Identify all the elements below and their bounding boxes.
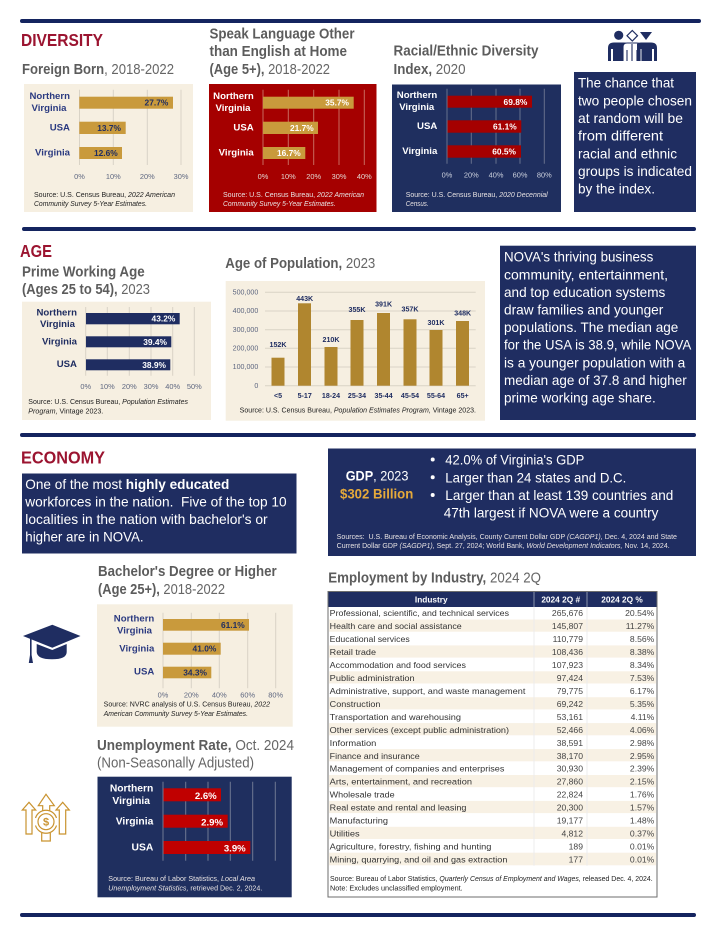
callout: highly educated workforce [22,474,296,554]
table: employment by industry: 4.06% [630,725,655,735]
panel: age of population chart: 0 [254,382,258,390]
callout: NOVA age explanation: NOVA's thriving business [504,250,653,265]
panel: age of population chart: 210K [323,336,340,344]
panel: age of population chart: 355K [349,306,366,314]
panel: prime working age chart: 0% [80,382,91,391]
panel: diversity index chart: Northern [397,90,437,101]
table: employment by industry: 145,807 [552,621,583,631]
panel: unemployment rate chart: 3.9% [224,844,246,855]
table: employment by industry: Professional, scientific, and technical services [330,608,509,618]
callout: highly educated workforce: One of the most highly educated [25,477,229,492]
title: unemployment rate [97,738,294,771]
panel: unemployment rate chart: Northern [110,783,153,794]
panel: foreign born chart: USA [50,122,70,133]
callout: highly educated workforce: higher are in NOVA. [25,530,144,545]
panel: age of population chart: 45-54 [401,392,419,400]
panel: diversity index chart: Virginia [399,102,435,113]
table: employment by industry: Industry [415,594,448,604]
panel: bachelor's degree chart: 40% [212,690,227,699]
panel: unemployment rate chart: Virginia [112,796,150,807]
panel: diversity index chart: 60% [513,170,528,180]
panel: language chart: Northern [213,91,254,102]
panel: language chart: 16.7% [277,148,301,158]
panel: foreign born chart: 27.7% [145,98,169,108]
callout: diversity index explanation: from different [578,129,663,144]
panel: prime working age chart: 50% [187,382,202,391]
panel: GDP: Sources: U.S. Bureau of Economic Analysis, County Current Dollar GDP (CAGDP1), Dec. 4, 2024 and State [337,534,677,541]
panel: diversity index chart: 80% [537,170,552,180]
table: employment by industry: 69,242 [557,699,583,709]
panel: language chart: Community Survey 5-Year Estimates. [223,201,336,208]
table: employment by industry: 19,177 [557,816,583,826]
table: employment by industry: Health care and social assistance [330,621,462,631]
panel: age of population chart: 65+ [457,392,469,400]
panel: prime working age chart: USA [57,359,77,370]
panel: foreign born chart: Virginia [31,103,67,114]
table: employment by industry: Educational services [330,634,410,644]
panel: prime working age chart [22,302,211,420]
callout: diversity index explanation: by the index. [578,182,655,197]
title: speak language other than english [210,27,355,78]
table: employment by industry: Note: Excludes unclassified employment. [330,885,463,892]
callout: diversity index explanation: The chance that [578,76,674,91]
panel: GDP: Larger than 24 states and D.C. [445,470,626,485]
panel: foreign born chart: 12.6% [94,148,118,158]
panel: diversity index chart: 0% [442,170,453,180]
panel: bachelor's degree chart: 80% [268,690,284,699]
panel: age of population chart: 400,000 [233,307,258,315]
table: employment by industry: 0.37% [630,828,655,838]
panel: GDP: $302 Billion [340,486,413,501]
table: employment by industry: 177 [569,854,583,864]
table: employment by industry: 53,161 [557,712,583,722]
panel: age of population chart: <5 [274,392,282,400]
table: employment by industry: 8.34% [630,660,655,670]
callout: NOVA age explanation: prime working age share. [504,391,656,406]
callout: NOVA age explanation: for the USA is 38.9, while NOVA [504,338,692,353]
callout: diversity index explanation: at random will be [578,111,683,126]
table: employment by industry: 107,923 [552,660,583,670]
table: employment by industry: 1.76% [630,790,655,800]
table: employment by industry: 2024 2Q # [541,594,580,604]
panel: unemployment rate chart [98,777,292,897]
icon: graduation cap [23,625,80,663]
panel: foreign born chart: 20% [140,172,155,181]
panel: age of population chart: 357K [402,306,419,314]
panel: language chart: 10% [281,172,296,181]
panel: diversity index chart [392,84,561,212]
panel: language chart: 35.7% [325,98,350,108]
table: employment by industry: 2024 2Q % [601,594,643,604]
table: employment by industry: Agriculture, forestry, fishing and hunting [330,842,492,852]
panel: age of population chart [226,281,485,421]
title: age of population: Age of Population, 2023 [225,256,375,272]
panel: prime working age chart: 40% [165,382,181,391]
panel: age of population chart: 200,000 [233,344,258,352]
panel: unemployment rate chart: 2.9% [201,817,223,828]
panel: language chart: 30% [332,172,347,181]
table: employment by industry: Source: Bureau of Labor Statistics, Quarterly Census of Employment and Wages, released Dec. 4, 2024. [330,876,653,883]
table: employment by industry: 97,424 [557,673,583,683]
panel: age of population chart: Source: U.S. Census Bureau, Population Estimates Program, Vintage 2023. [240,408,476,415]
panel: age of population chart: 301K [428,319,445,327]
title: racial ethnic diversity index [394,44,539,78]
title: unemployment rate: Unemployment Rate, Oct. 2024 [97,738,294,754]
title: racial ethnic diversity index: Index, 2020 [394,62,466,78]
panel: prime working age chart: 20% [122,382,137,391]
table: employment by industry: 1.48% [630,816,655,826]
panel: bachelor's degree chart: 41.0% [193,644,217,654]
panel: bachelor's degree chart: USA [134,667,154,678]
icon: diverse people [608,30,657,61]
panel: prime working age chart: 43.2% [152,314,176,324]
title: racial ethnic diversity index: Racial/Ethnic Diversity [394,44,539,60]
table: employment by industry: 2.39% [630,764,655,774]
table: employment by industry: Utilities [330,828,360,838]
callout: NOVA age explanation: median age of 37.8 and higher [504,373,687,388]
panel: GDP: 42.0% of Virginia's GDP [445,453,584,468]
panel: age of population chart: 5-17 [298,392,312,400]
table: employment by industry: 2.15% [630,777,655,787]
table: employment by industry: 20.54% [625,608,655,618]
table: employment by industry: 7.53% [630,673,655,683]
panel: language chart: Source: U.S. Census Bureau, 2022 American [223,192,364,199]
table: employment by industry: Administrative, support, and waste management [330,686,526,696]
panel: language chart: 20% [306,172,322,181]
title: speak language other than english: Speak Language Other [210,27,355,43]
panel: age of population chart: 35-44 [375,392,393,400]
panel: diversity index chart: 40% [489,170,504,180]
callout: NOVA age explanation [500,246,696,420]
callout: diversity index explanation: groups is indicated [578,164,692,179]
panel: bachelor's degree chart: 60% [240,690,256,699]
panel: GDP: Larger than at least 139 countries and [445,488,673,503]
panel: language chart: 40% [357,172,372,181]
table: employment by industry: 38,591 [557,738,583,748]
table: employment by industry: Finance and insurance [330,751,420,761]
table: employment by industry: Transportation and warehousing [330,712,461,722]
title: bachelor's degree [98,564,277,598]
table: employment by industry: Arts, entertainment, and recreation [330,777,472,787]
table: employment by industry: 8.38% [630,647,655,657]
table: employment by industry: 110,779 [553,634,583,644]
table: employment by industry: Manufacturing [330,816,388,826]
heading: economy: ECONOMY [21,447,105,467]
table: employment by industry: Public administration [330,673,415,683]
panel: bachelor's degree chart: Northern [114,614,154,625]
panel: bachelor's degree chart: 34.3% [183,668,208,678]
table: employment by industry: 265,676 [552,608,583,618]
table: employment by industry: 2.98% [630,738,655,748]
table: employment by industry: 0.01% [630,842,655,852]
panel: prime working age chart: Program, Vintage 2023. [28,408,103,415]
callout: highly educated workforce: workforces in the nation. Five of the top 10 [24,495,287,510]
panel: bachelor's degree chart: 0% [158,690,169,699]
panel: age of population chart: 300,000 [233,326,258,334]
table: employment by industry: Accommodation and food services [330,660,466,670]
title: prime working age: Prime Working Age [22,264,145,280]
title: bachelor's degree: (Age 25+), 2018-2022 [98,582,225,598]
panel: GDP: GDP, 2023 [346,469,409,484]
panel: diversity index chart: 60.5% [492,147,517,157]
panel: age of population chart: 100,000 [233,363,258,371]
panel: GDP [328,448,696,556]
panel: unemployment rate chart: Source: Bureau of Labor Statistics, Local Area [108,876,255,883]
panel: language chart: Virginia [219,147,254,158]
panel: foreign born chart: Source: U.S. Census Bureau, 2022 American [34,192,175,199]
panel: age of population chart: 348K [454,310,472,318]
panel: foreign born chart: 30% [174,172,189,181]
panel: prime working age chart: 30% [144,382,159,391]
table: employment by industry: Information [330,738,377,748]
callout: diversity index explanation: two people chosen [578,93,692,108]
panel: diversity index chart: Virginia [402,146,438,157]
heading: age: AGE [20,241,52,261]
callout: highly educated workforce: localities in the nation with bachelor's or [25,512,268,527]
table: employment by industry: 4.11% [631,712,655,722]
panel: language chart: Virginia [215,103,251,114]
panel: prime working age chart: 39.4% [143,337,168,347]
panel: diversity index chart: Source: U.S. Census Bureau, 2020 Decennial [406,192,548,199]
title: prime working age: (Ages 25 to 54), 2023 [22,282,150,298]
panel: prime working age chart: Virginia [42,336,78,347]
panel: age of population chart: 443K [296,295,314,303]
panel: bachelor's degree chart: Virginia [117,625,153,636]
table: employment by industry: 20,300 [557,803,583,813]
panel: unemployment rate chart: USA [132,842,154,853]
title: employment by industry: Employment by Industry, 2024 2Q [328,571,541,587]
panel: GDP: 47th largest if NOVA were a country [444,506,658,521]
panel: bachelor's degree chart: 20% [184,690,199,699]
table: employment by industry: 0.01% [630,854,655,864]
panel: diversity index chart: Census. [406,201,429,208]
panel: unemployment rate chart: Unemployment Statistics, retrieved Dec. 2, 2024. [108,885,262,892]
callout: diversity index explanation: racial and ethnic [578,146,677,161]
panel: language chart: USA [233,122,254,133]
callout: diversity index explanation [574,72,696,212]
table: employment by industry: Mining, quarrying, and oil and gas extraction [330,854,508,864]
title: foreign born: Foreign Born, 2018-2022 [22,62,174,78]
panel: bachelor's degree chart: 61.1% [221,620,245,630]
table: employment by industry: 79,775 [557,686,583,696]
table: employment by industry: Retail trade [330,647,376,657]
panel: prime working age chart: Source: U.S. Census Bureau, Population Estimates [28,399,188,406]
panel: language chart: 0% [258,172,269,181]
table: employment by industry: 5.35% [630,699,655,709]
title: speak language other than english: than English at Home [210,44,347,60]
panel: bachelor's degree chart: Virginia [119,643,155,654]
panel: age of population chart: 55-64 [427,392,445,400]
title: unemployment rate: (Non-Seasonally Adjusted) [97,755,254,771]
callout: NOVA age explanation: is a younger population with a [504,355,686,370]
panel: diversity index chart: USA [417,121,437,132]
table: employment by industry: 189 [569,842,583,852]
table: employment by industry: 1.57% [630,803,655,813]
table: employment by industry: 30,930 [557,764,583,774]
panel: language chart: 21.7% [290,123,314,133]
table: employment by industry: Wholesale trade [330,790,395,800]
callout: NOVA age explanation: draw families and younger [504,302,664,317]
panel: bachelor's degree chart [97,604,293,727]
panel: prime working age chart: Virginia [40,319,76,330]
panel: language chart [209,84,376,212]
panel: prime working age chart: 10% [100,382,115,391]
table: employment by industry: 8.56% [630,634,655,644]
panel: bachelor's degree chart: American Community Survey 5-Year Estimates. [103,711,248,718]
panel: diversity index chart: 61.1% [493,122,517,132]
icon: money with rising arrows [22,794,69,841]
panel: foreign born chart [24,84,193,212]
table: employment by industry: Management of companies and enterprises [330,764,504,774]
panel: foreign born chart: Community Survey 5-Year Estimates. [34,201,147,208]
table: employment by industry: 27,860 [557,777,583,787]
title: bachelor's degree: Bachelor's Degree or Higher [98,564,277,580]
heading: diversity: DIVERSITY [21,30,103,50]
panel: age of population chart: 25-34 [348,392,366,400]
table: employment by industry: 22,824 [557,790,583,800]
panel: foreign born chart: 10% [106,172,121,181]
callout: NOVA age explanation: and top education systems [504,285,665,300]
panel: foreign born chart: 13.7% [97,123,122,133]
table: employment by industry: Construction [330,699,381,709]
panel: prime working age chart: 38.9% [142,360,167,370]
panel: age of population chart: 500,000 [233,288,258,296]
table: employment by industry: 108,436 [552,647,583,657]
table: employment by industry: 6.17% [630,686,655,696]
table: employment by industry [328,592,657,897]
table: employment by industry: Other services (except public administration) [330,725,509,735]
panel: diversity index chart: 20% [464,170,479,180]
panel: foreign born chart: Virginia [35,147,71,158]
panel: bachelor's degree chart: Source: NVRC analysis of U.S. Census Bureau, 2022 [104,702,270,709]
panel: foreign born chart: 0% [74,172,85,181]
panel: age of population chart: 391K [375,300,393,308]
panel: age of population chart: 18-24 [322,392,340,400]
panel: foreign born chart: Northern [29,91,70,102]
table: employment by industry: 52,466 [557,725,583,735]
panel: diversity index chart: 69.8% [504,97,528,107]
callout: NOVA age explanation: community, entertainment, [504,267,668,282]
table: employment by industry: 11.27% [626,621,655,631]
table: employment by industry: 4,812 [561,828,583,838]
panel: prime working age chart: Northern [36,308,77,319]
table: employment by industry: 2.95% [630,751,655,761]
icon: money with rising arrows: $ [43,817,49,829]
table: employment by industry: 38,170 [557,751,583,761]
callout: NOVA age explanation: populations. The median age [504,320,679,335]
panel: age of population chart: 152K [270,341,287,349]
table: employment by industry: Real estate and rental and leasing [330,803,467,813]
title: speak language other than english: (Age 5+), 2018-2022 [210,62,330,78]
title: prime working age [22,264,150,298]
panel: unemployment rate chart: Virginia [116,816,154,827]
panel: GDP: Current Dollar GDP (SAGDP1), Sept. 27, 2024; World Bank, World Development Indicators, Nov. 14, 2024. [337,543,670,550]
panel: unemployment rate chart: 2.6% [195,791,217,802]
